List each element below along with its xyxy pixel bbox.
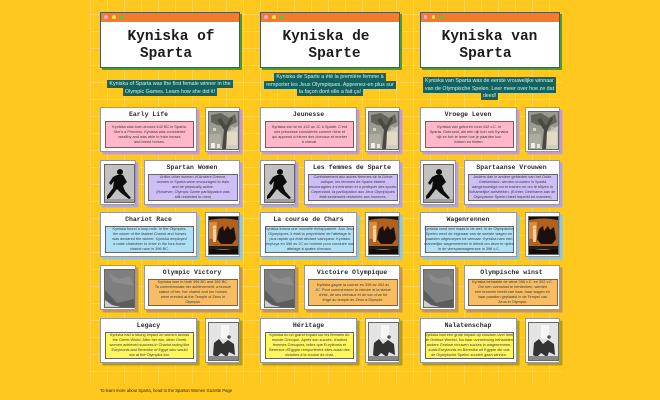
- card: Spartan Women: women in Sparta were encouraged to train: [157, 180, 229, 184]
- card: La course de Chars: Kyniska trouva une nouvelle échappatoire. Aux Jeux: [265, 227, 354, 231]
- card: Jeunesse: qui apprend à élever des chevaux et monter: [272, 134, 347, 138]
- card: Nalatenschap: zoals Euryleonis en Berenike uit Egypte die ook: [428, 348, 510, 352]
- image: horse engraving: [365, 318, 400, 363]
- card: Chariot Race: Chariot Race: [125, 216, 172, 223]
- card: Olympische winst: Olympische winst: [480, 269, 543, 276]
- card: Jeunesse: Jeunesse: [293, 111, 324, 118]
- title card: Kyniska of Sparta: Kyniska of: [127, 29, 214, 45]
- card: Héritage: [260, 318, 357, 363]
- card: Olympic Victory: To commemorate her achievement, a bronze: [155, 285, 231, 289]
- footer note: To learn more about Sparta, head to the Spartan Women Gazette Page: [100, 388, 232, 393]
- card: Legacy: Euryleonis and Berenike of Egypt who would: [111, 348, 188, 352]
- card: Olympische winst: een bronzen beeld van haar, haar wagen en: [475, 290, 550, 294]
- title card: Kyniska van Sparta: [420, 12, 560, 68]
- card: Spartan Women: Spartan Women: [167, 164, 217, 171]
- card: Nalatenschap: de Griekse Wereld. Na haar overwinning behaalden: [425, 338, 513, 342]
- image: Spartan runner: [260, 160, 296, 205]
- card: Les femmes de Sparte: Les femmes de Sparte: [313, 164, 391, 171]
- card: Chariot Race: the owner of the fastest Chariot and horses: [113, 232, 186, 236]
- intro text: deed!: [483, 93, 496, 99]
- card: Victoire Olympique: Victoire Olympique: [317, 269, 387, 276]
- card: Vroege Leven: Vroege Leven: [445, 111, 491, 118]
- card: La course de Chars: attelage à quatre chevaux.: [287, 247, 332, 251]
- card: Héritage: monde Grecque. Après son succès, d'autres: [272, 338, 347, 342]
- card: Early Life: wealthy and was able to train horses: [118, 134, 181, 138]
- card: La course de Chars: employa en 396 av JC un homme pour conduire son: [265, 242, 354, 246]
- image: Spartan runner: [420, 160, 456, 205]
- card: Olympic Victory: Kyniska won in both 396 BC and 392 BC.: [158, 280, 228, 284]
- card: Early Life: [100, 107, 197, 152]
- card: Olympic Victory: [144, 265, 240, 310]
- card: Spartaanse Vrouwen: Olympische Spelen bleef beperkt tot mannen): [473, 195, 551, 199]
- card: Héritage: Kyniska eu un grand impact sur les femmes du: [270, 333, 349, 337]
- card: Legacy: win at the Olympics too.: [129, 353, 170, 357]
- card: Legacy: [100, 318, 197, 363]
- card: Spartan Women: Unlike other women of Ancient Greece,: [160, 175, 226, 179]
- intro text: Kyniska of Sparta was the first female winner in the: [109, 81, 231, 87]
- intro text: [264, 73, 396, 96]
- card: Chariot Race: Kyniska found a loop-hole. In the Olympics,: [113, 227, 186, 231]
- card: Spartan Women: still restricted to men): [175, 195, 211, 199]
- card: Olympic Victory: statue of her, her chariot and her horses: [159, 290, 227, 294]
- title card: Kyniska of Sparta: Sparta: [140, 46, 192, 62]
- card: Olympische winst: Om een overwinst te herdenken, werden: [478, 285, 547, 289]
- card: Victoire Olympique: Kyniska gagne la course en 396 av 392 av: [317, 282, 389, 286]
- column: English: [100, 12, 242, 366]
- card: Early Life: Kyniska was born around 442 BC in Sparta.: [112, 124, 187, 128]
- card: Nalatenschap: andere Griekse vrouwen succes in wagenrennen,: [427, 343, 511, 347]
- intro text: remporter les Jeux Olympiques. Apprenez-en plus sur: [266, 82, 394, 88]
- card: Jeunesse: Kyniska est né en 442 av JC à Sparte. C'est: [272, 124, 347, 128]
- card: Vroege Leven: Sparta. Gebroeid, als een rijk kon ook Kyniska: [430, 130, 508, 134]
- card: Nalatenschap: [420, 318, 516, 363]
- card: Les femmes de Sparte: Contrairement aux autres femmes de la Grèce: [313, 175, 393, 179]
- card: Les femmes de Sparte: Cependant, la participation aux Jeux Olympiques: [311, 190, 395, 194]
- card: Héritage: femmes Grecques, telles que Euryléonis et: [273, 343, 346, 347]
- card: Chariot Race: was declared the winner. Kyniska employed: [112, 237, 187, 241]
- card: Chariot Race: a male charioteer to drive in the four-horse: [113, 242, 186, 246]
- card: Wagenrennen: Kyniska vond een maas in de wet. In de Olympische: [424, 227, 514, 231]
- card: Spartaanse Vrouwen: Griekenland, werden vrouwen in Sparta: [479, 180, 546, 184]
- card: Olympische winst: haar paarden geplaatst in de Tempel van: [478, 295, 547, 299]
- card: La course de Chars: La course de Chars: [273, 216, 344, 223]
- card: Early Life: She's a Princess. Kyniska was considered: [114, 130, 185, 134]
- image: horse engraving: [524, 318, 560, 363]
- card: Spartan Women: (However, Olympic Game participation was: [156, 190, 230, 194]
- title card: Kyniska de Sparte: [260, 12, 400, 68]
- card: Olympische winst: Zeus in Olympia.: [498, 300, 527, 304]
- card: Les femmes de Sparte: [304, 160, 400, 205]
- image: Spartan runner: [100, 160, 136, 205]
- image: stone relief: [420, 265, 456, 310]
- card: Spartaanse Vrouwen: lichamelijke activiteiten. (Echter, Deelname aan de: [470, 190, 555, 194]
- card: Nalatenschap: de Olympische Spelen zouden gaan winnen.: [431, 353, 507, 357]
- intro text: [423, 77, 556, 100]
- card: Jeunesse: [260, 107, 357, 152]
- card: Jeunesse: à cheval.: [302, 140, 317, 144]
- card: Vroege Leven: [420, 107, 516, 152]
- card: La course de Chars: plus rapide qui était déclaré vainqueur. Kyniska: [269, 237, 350, 241]
- card: Nalatenschap: Kyniska had een grote impact op vrouwen over heel: [425, 333, 513, 337]
- card: Vroege Leven: fokken en fokten.: [454, 140, 484, 144]
- image: chariot vase: [205, 212, 240, 257]
- card: Spartaanse Vrouwen: Spartaanse Vrouwen: [476, 164, 547, 171]
- card: Victoire Olympique: d'elle, de ses chevaux et de son char fut: [319, 292, 387, 296]
- card: Wagenrennen: in de vierspanwagenrace in 396 v.C.: [438, 247, 500, 251]
- image: chariot vase: [365, 212, 400, 257]
- card: Héritage: victoires à la course de char.: [285, 353, 334, 357]
- card: Jeunesse: une princesse considérée comme riche et: [274, 130, 345, 134]
- card: Early Life: and breed horses.: [134, 140, 165, 144]
- card: Nalatenschap: Nalatenschap: [445, 322, 491, 329]
- image: olive tree: [365, 107, 400, 152]
- card: Les femmes de Sparte: était seulement restreinte aux hommes.: [319, 195, 387, 199]
- card: Legacy: Legacy: [137, 322, 160, 329]
- card: Legacy: Kyniska had a strong impact on women across: [110, 333, 189, 337]
- card: Victoire Olympique: érigé au temple de Zeus à Olympie.: [323, 298, 383, 302]
- card: Olympische winst: [464, 265, 560, 310]
- image: olive tree: [205, 107, 240, 152]
- card: Wagenrennen: mannelijke wagenmenner in dienst om deze te rijden: [424, 242, 514, 246]
- intro text: Olympic Games. Learn how she did it!: [125, 89, 215, 95]
- card: Héritage: Bérénice d'Égypte remportèrent elles aussi des: [269, 348, 350, 352]
- image: stone relief: [100, 265, 136, 310]
- title card: Kyniska van Sparta: Sparta: [459, 46, 512, 62]
- image: olive tree: [524, 107, 560, 152]
- card: Olympic Victory: Olympic Victory: [163, 269, 221, 276]
- image: stone relief: [260, 265, 296, 310]
- card: Chariot Race: chariot race in 396 BC.: [130, 247, 169, 251]
- card: Olympische winst: Kyniska behaalde de winst 396 v.C. en 392 v.C.: [472, 280, 553, 284]
- intro text: Kyniska de Sparte a été la première femme à: [276, 74, 384, 80]
- card: Vroege Leven: rijk en fort te leren hoe je paarden kon: [437, 134, 501, 138]
- card: Wagenrennen: paarden uitgeroepen tot winnaar. Kyniska nam een: [426, 237, 512, 241]
- card: Wagenrennen: [420, 212, 516, 257]
- title card: Kyniska de Sparte: Kyniska de: [282, 29, 370, 45]
- card: Spartan Women: and be physically active.: [172, 185, 214, 189]
- card: Victoire Olympique: JC. Pour commémorer la victoire et la statue: [315, 288, 391, 292]
- column: Dutch: [420, 12, 562, 366]
- image: chariot vase: [524, 212, 560, 257]
- card: Wagenrennen: Spelen werd de eigenaar van de snelste wagen en: [426, 232, 512, 236]
- image: horse engraving: [205, 318, 240, 363]
- card: Early Life: Early Life: [129, 111, 168, 118]
- title card: Kyniska van Sparta: Kyniska van: [442, 29, 537, 45]
- card: Olympic Victory: were erected at the Temple of Zeus in: [161, 295, 225, 299]
- card: Victoire Olympique: [304, 265, 400, 310]
- intro text: Kyniska van Sparta was de eerste vrouwelijke winnaar: [425, 78, 554, 84]
- card: Spartan Women: [144, 160, 240, 205]
- card: Les femmes de Sparte: encouragées à s'entraîner et à pratiquer des sports.: [309, 185, 397, 189]
- card: Wagenrennen: Wagenrennen: [447, 216, 489, 223]
- card: Legacy: women achieved success in Chariot racing like: [110, 343, 189, 347]
- card: La course de Chars: Olympiques, il était la propriétaire de l'attelage le: [268, 232, 351, 236]
- card: Les femmes de Sparte: antique, les femmes de Sparte étaient: [321, 180, 385, 184]
- card: Vroege Leven: Kyniska van geboren rond 442 v.C. in: [437, 124, 501, 128]
- intro text: la façon dont elle a fait ça!: [299, 89, 361, 95]
- column: French: [260, 12, 402, 366]
- title card: Kyniska de Sparte: Sparte: [308, 46, 361, 62]
- card: Chariot Race: [100, 212, 197, 257]
- intro text: [107, 80, 233, 96]
- intro text: van de Olympische Spelen. Leer meer over hoe ze dat: [425, 86, 554, 92]
- card: Spartaanse Vrouwen: aangemoedigd om te trainen en om te blijven in: [472, 185, 553, 189]
- card: Héritage: Héritage: [293, 322, 324, 329]
- card: La course de Chars: [260, 212, 357, 257]
- card: Spartaanse Vrouwen: Anders dan in andere gebieden van het Oude: [474, 175, 551, 179]
- title card: Kyniska of Sparta: [100, 12, 240, 68]
- card: Spartaanse Vrouwen: [464, 160, 560, 205]
- card: Legacy: the Greek World. After her win, other Greek: [113, 338, 186, 342]
- card: Olympic Victory: Olympia.: [185, 300, 201, 304]
